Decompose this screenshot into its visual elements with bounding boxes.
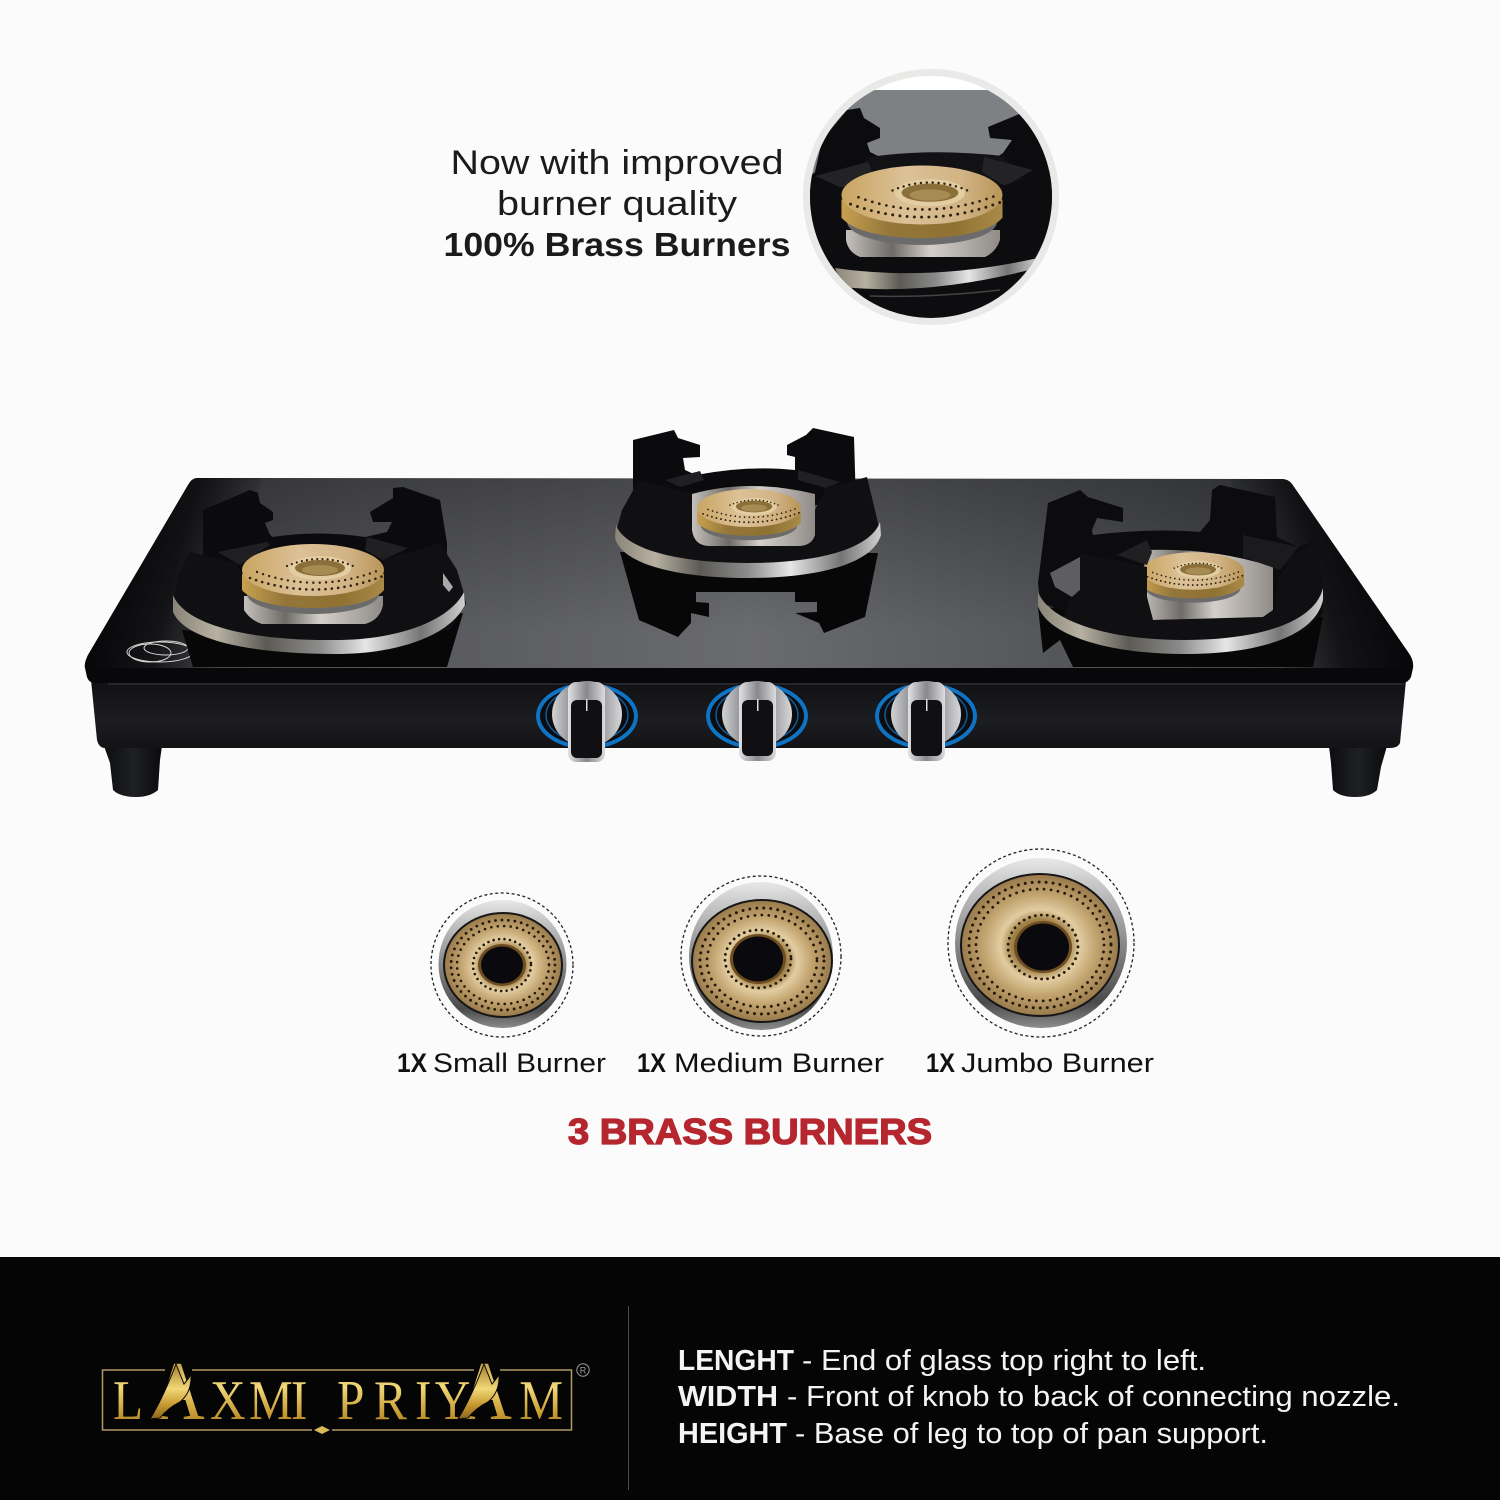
burner label: jumbo: 1X bbox=[926, 1048, 955, 1078]
control knob 2 bbox=[706, 681, 808, 761]
brand logo: L bbox=[113, 1370, 143, 1432]
left back prong and side bbox=[810, 108, 880, 200]
glass top bbox=[85, 478, 1413, 668]
right back spoke bbox=[1243, 535, 1298, 570]
brass burner bbox=[841, 166, 1003, 245]
silver bowl bbox=[846, 230, 1000, 257]
left brass burner bbox=[242, 544, 384, 614]
right steel interior bbox=[1142, 550, 1273, 620]
registered mark bbox=[577, 1364, 589, 1376]
centre silver bowl bbox=[692, 486, 815, 546]
left steel ring bbox=[173, 592, 465, 654]
right front left arm bbox=[1060, 540, 1323, 648]
body highlight line bbox=[108, 683, 1404, 685]
left leg bbox=[104, 746, 162, 797]
flame on left A bbox=[150, 1364, 191, 1419]
small burner top view bbox=[431, 893, 573, 1037]
centre ring and arms bbox=[616, 477, 880, 568]
left ring and arms bbox=[173, 543, 466, 648]
right brass burner bbox=[1142, 552, 1244, 603]
heading: 3 brass burners: 3 BRASS BURNERS bbox=[568, 1111, 932, 1152]
dimension notes: - End of glass top right to left. bbox=[802, 1345, 1206, 1377]
right left window bbox=[1050, 557, 1080, 597]
dimension notes: HEIGHT bbox=[678, 1418, 787, 1450]
left burner reflection bbox=[182, 613, 463, 667]
centre back spokes bbox=[665, 470, 840, 488]
left burner bbox=[173, 487, 466, 667]
stove body bbox=[91, 680, 1406, 748]
centre brass burner bbox=[697, 489, 801, 540]
dimension notes: WIDTH bbox=[678, 1381, 778, 1413]
jumbo burner top view bbox=[948, 849, 1134, 1037]
right spoke bbox=[982, 157, 1033, 186]
footer panel bbox=[0, 1257, 1500, 1500]
back ring arch bbox=[878, 152, 999, 176]
lower black body bbox=[810, 170, 1052, 318]
glass left edge shadow bbox=[85, 478, 262, 668]
centre back prongs bbox=[633, 428, 856, 505]
left back spokes bbox=[218, 537, 408, 565]
glass right edge shadow bbox=[1230, 479, 1413, 668]
left side window bbox=[443, 573, 453, 592]
dimension notes: - Base of leg to top of pan support. bbox=[795, 1418, 1268, 1450]
control knob 3 bbox=[875, 681, 977, 761]
left back prongs and arch bbox=[203, 487, 447, 580]
burner label: jumbo: Jumbo Burner bbox=[961, 1048, 1154, 1078]
burner label: small: Small Burner bbox=[433, 1048, 606, 1078]
burner label: small: 1X bbox=[397, 1048, 427, 1078]
medium burner top view bbox=[681, 876, 841, 1036]
centre steel ring bbox=[615, 522, 881, 578]
gas stove product bbox=[85, 428, 1413, 797]
brand logo: A bbox=[151, 1345, 205, 1438]
dimension notes: - Front of knob to back of connecting nozzle. bbox=[787, 1381, 1400, 1413]
glass front edge bbox=[85, 668, 1413, 683]
right burner bbox=[1038, 485, 1323, 667]
right leg bbox=[1329, 746, 1387, 797]
centre burner bbox=[615, 428, 881, 637]
centre burner reflection bbox=[620, 552, 878, 637]
callout text: improved burner quality: Now with improved bbox=[450, 144, 784, 182]
brand logo bbox=[102, 1345, 589, 1438]
left spoke bbox=[815, 162, 872, 188]
brand logo: A bbox=[458, 1345, 512, 1438]
right front spoke bbox=[1117, 540, 1152, 565]
glass shading bbox=[85, 478, 1413, 668]
right back prong and side bbox=[988, 114, 1052, 200]
burner label: medium: Medium Burner bbox=[674, 1048, 884, 1078]
steel band bbox=[835, 258, 1038, 289]
brand logo: XMI PRIY bbox=[210, 1370, 470, 1432]
right back prongs and silhouette bbox=[1038, 485, 1323, 648]
registered mark: R bbox=[580, 1366, 587, 1376]
right steel ring bbox=[1038, 588, 1323, 654]
reflection line bbox=[870, 290, 1000, 296]
dimension notes bbox=[678, 1345, 1400, 1450]
control knob 1 bbox=[536, 681, 638, 762]
burner label: medium: 1X bbox=[637, 1048, 666, 1078]
dimension notes: LENGHT bbox=[678, 1345, 794, 1377]
flame on right A bbox=[458, 1364, 499, 1419]
glass logo mark bbox=[127, 641, 193, 662]
brand logo: M bbox=[519, 1370, 563, 1432]
right burner reflection bbox=[1038, 607, 1323, 667]
left silver bowl bbox=[244, 596, 383, 624]
callout text: improved burner quality: 100% Brass Burners bbox=[444, 226, 790, 263]
callout: circular brass burner close-up bbox=[800, 72, 1062, 330]
callout text: improved burner quality bbox=[444, 144, 790, 263]
callout text: improved burner quality: burner quality bbox=[497, 185, 737, 223]
